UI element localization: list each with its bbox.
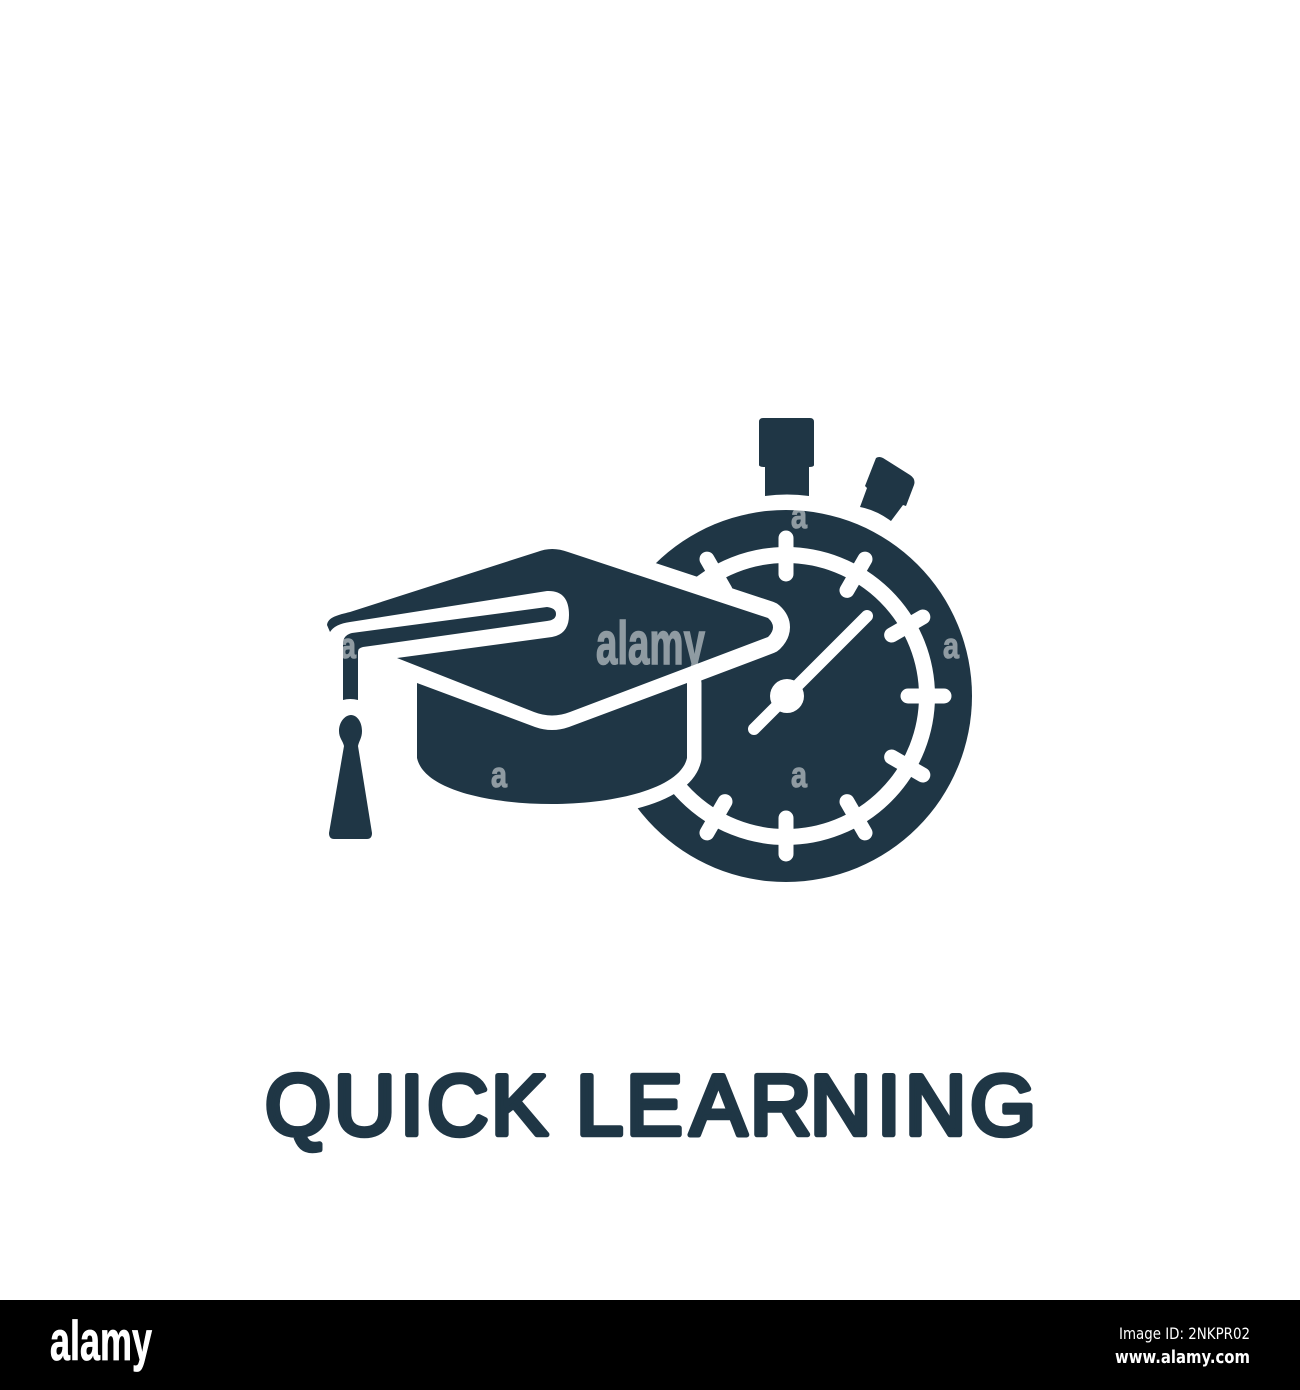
watermark: repeated letters [340, 495, 960, 795]
tassel [329, 715, 372, 839]
title: QUICK LEARNING [265, 1058, 1036, 1154]
cap white halo [350, 549, 773, 804]
stopwatch tick marks [707, 538, 944, 854]
website: www.alamy.com [1115, 1347, 1250, 1368]
tassel strap [343, 607, 556, 700]
stopwatch dial ring [645, 555, 927, 837]
stopwatch top crown [759, 418, 814, 496]
watermark: center logo: alamy [596, 610, 705, 677]
watermark: repeated letters: a [791, 754, 808, 795]
watermark: repeated letters: a [491, 754, 508, 795]
stopwatch side button [860, 457, 914, 521]
footer logo: alamy [50, 1309, 152, 1372]
icon: stopwatch [600, 418, 972, 882]
image id: Image ID: 2NKPR02 [1119, 1324, 1250, 1343]
stopwatch hand [754, 616, 867, 729]
stopwatch body [600, 510, 972, 882]
watermark: repeated letters: a [943, 625, 960, 666]
cap base [417, 683, 687, 804]
footer bar [0, 1300, 1300, 1390]
icon: graduation cap [327, 549, 773, 839]
watermark: repeated letters: a [340, 625, 357, 666]
watermark: repeated letters: a [791, 495, 808, 536]
mortarboard [327, 549, 773, 716]
